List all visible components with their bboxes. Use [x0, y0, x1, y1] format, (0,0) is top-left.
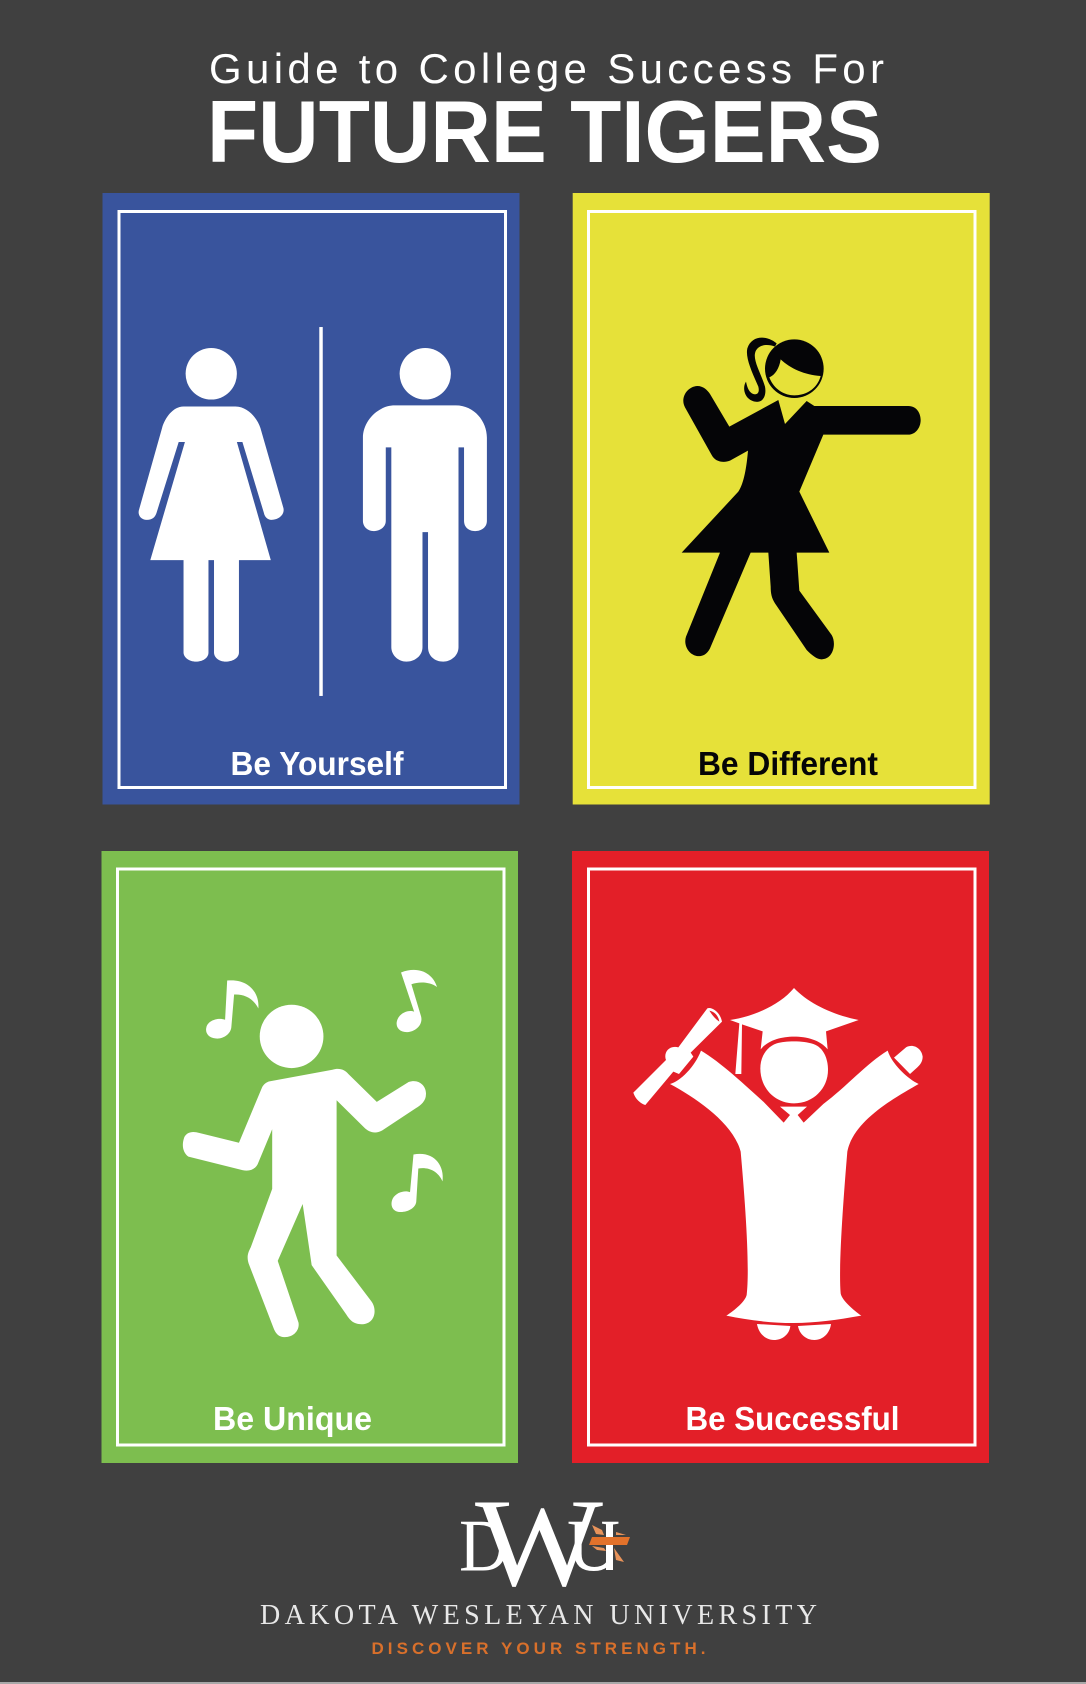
title line: future tigers: FUTURE TIGERS	[207, 82, 882, 181]
tagline: DISCOVER YOUR STRENGTH.	[372, 1639, 706, 1658]
logo monogram DWU: U	[567, 1506, 620, 1588]
panel: be unique	[102, 851, 518, 1463]
icon: woman and man restroom figures	[139, 327, 487, 696]
label: be yourself: Be Yourself	[230, 745, 404, 782]
logo: dakota wesleyan university	[260, 1474, 817, 1658]
logo monogram DWU	[459, 1474, 630, 1613]
title	[207, 45, 884, 181]
label: be unique: Be Unique	[213, 1400, 372, 1437]
panel: be successful	[572, 851, 989, 1463]
label: be different: Be Different	[698, 745, 878, 782]
logo monogram DWU: D	[459, 1506, 509, 1588]
label: be successful: Be Successful	[686, 1400, 900, 1437]
icon: graduate with cap and diploma	[633, 988, 923, 1340]
university name: DAKOTA WESLEYAN UNIVERSITY	[260, 1600, 817, 1631]
icon: dancing girl with ponytail	[682, 338, 921, 659]
icon: dancing person with music notes	[183, 970, 443, 1337]
logo monogram DWU: W	[475, 1474, 603, 1613]
title line: guide: Guide to College Success For	[209, 45, 884, 92]
panel: be different	[573, 193, 990, 804]
panel: be yourself	[102, 193, 520, 804]
